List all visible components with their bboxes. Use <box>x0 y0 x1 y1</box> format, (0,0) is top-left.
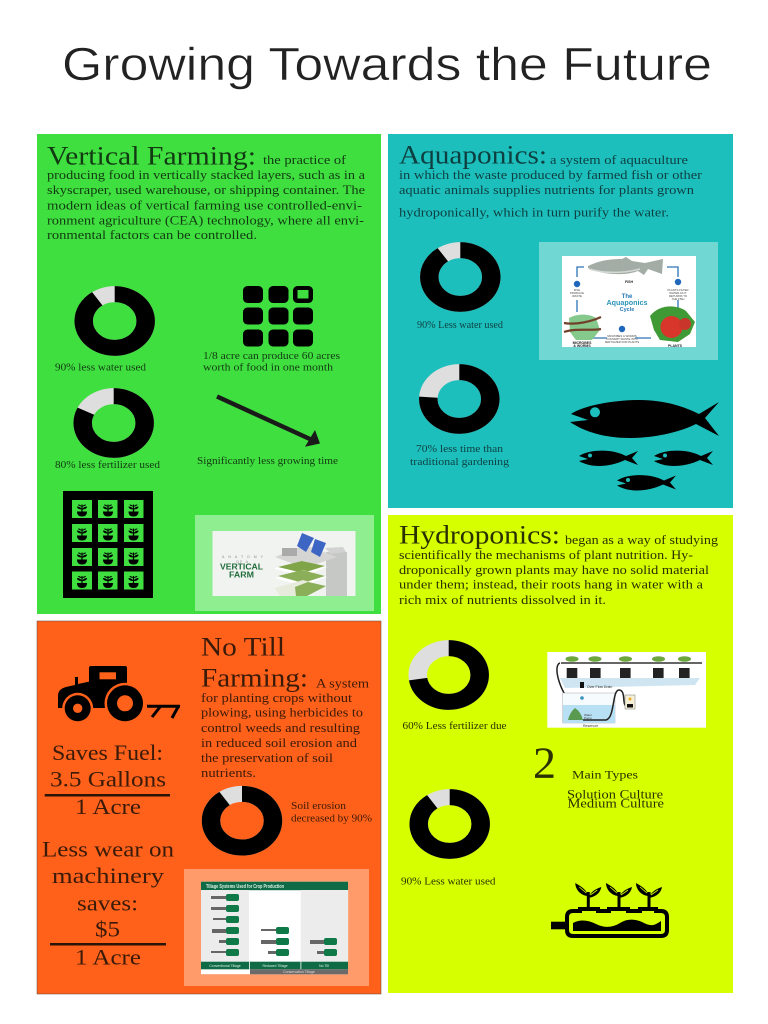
text block: aquaponics description: in which the waste produced by farmed fish or other <box>399 168 703 182</box>
stat: less wear on machinery: $5 <box>95 917 120 942</box>
image: aquaponics cycle: & WORMS <box>573 344 591 348</box>
image: aquaponics cycle: Aquaponics <box>606 300 648 307</box>
text block: aquaponics description: aquatic animals supplies nutrients for plants grown <box>399 183 695 197</box>
image: hydroponic system diagram: Water <box>584 713 592 717</box>
caption: 70% less time: traditional gardening <box>410 457 510 468</box>
stat: saves fuel: 1 Acre <box>75 794 141 819</box>
arrow: downward trend <box>217 396 320 447</box>
text block: vertical farming description: ronmental factors can be controlled. <box>47 228 257 242</box>
image: aquaponics cycle <box>539 242 718 360</box>
image: aquaponics cycle: PLANTS FILTER <box>667 288 689 292</box>
stat: saves fuel: Saves Fuel: <box>52 740 163 765</box>
text block: vertical farming description: the practice of <box>263 153 347 167</box>
text block: no till description: the preservation of soil <box>201 751 334 765</box>
image: aquaponics cycle: FISH <box>574 288 580 292</box>
image: hydroponic system diagram: Over Flow Drain <box>587 685 612 689</box>
caption: soil erosion: Soil erosion <box>291 801 347 812</box>
donut chart: soil erosion <box>211 794 273 848</box>
text block: no till description: plowing, using herbicides to <box>201 706 363 720</box>
text block: no till description: in reduced soil erosion and <box>201 736 358 750</box>
image: tillage systems chart: Reduced Tillage <box>262 964 288 968</box>
image: aquaponics cycle: MICROBES <box>573 341 592 345</box>
text block: aquaponics description: hydroponically, which in turn purify the water. <box>399 206 669 220</box>
text block: aquaponics description: a system of aquaculture <box>550 153 689 167</box>
stat: less wear on machinery: saves: <box>77 891 138 916</box>
text block: aquaponics description <box>399 153 703 220</box>
icon: tractor with plow <box>58 666 180 724</box>
image: tillage systems chart: Conservation Tillage <box>283 970 315 974</box>
panel: vertical farming <box>37 134 381 614</box>
text block: no till description: control weeds and resulting <box>201 721 361 735</box>
panel: aquaponics <box>388 134 733 508</box>
image: aquaponics cycle: The <box>622 294 633 300</box>
text: solution and medium culture: Medium Culture <box>568 797 665 811</box>
title: Growing Towards the Future <box>62 38 712 90</box>
text block: vertical farming description: producing food in vertically stacked layers, such as in a <box>47 168 366 182</box>
text: solution and medium culture <box>567 787 665 811</box>
text block: no till description <box>201 676 369 780</box>
text block: vertical farming description: skyscraper, used warehouse, or shipping container. The <box>47 183 366 197</box>
icon: small fish left <box>579 451 638 466</box>
image: aquaponics cycle: MICROBES & WORMS <box>607 334 637 338</box>
image: aquaponics cycle: CONVERT WASTE INTO <box>606 337 639 341</box>
image: hydroponic system diagram <box>547 652 706 728</box>
text block: hydroponics description: under them; instead, their roots hang in water with a <box>399 578 704 592</box>
image: aquaponics cycle: WASTE <box>572 294 582 298</box>
image: tillage systems chart: Tillage Systems Used for Crop Production <box>206 884 284 890</box>
donut chart: 90% less water <box>429 250 491 304</box>
caption: 1/8 acre <box>203 351 340 374</box>
icon: vertical stacked plant pots <box>63 491 153 598</box>
caption: 70% less time <box>410 444 510 468</box>
text block: hydroponics description: rich mix of nutrients dissolved in it. <box>399 593 606 607</box>
donut chart: 90% less water <box>84 294 146 348</box>
heading: no till farming: No Till <box>201 632 285 662</box>
heading: aquaponics: Aquaponics: <box>399 140 547 170</box>
donut chart: 80% less fertilizer <box>83 396 145 450</box>
panel: hydroponics <box>388 515 733 993</box>
icon: large fish <box>570 400 719 438</box>
stat: less wear on machinery: machinery <box>52 863 164 888</box>
image: hydroponic system diagram: Reservoir <box>583 724 599 728</box>
text block: no till description: nutrients. <box>201 766 256 780</box>
caption: 90% less water: 90% Less water used <box>401 876 496 888</box>
image: aquaponics cycle: PLANTS <box>668 344 683 348</box>
stat: less wear on machinery: Less wear on <box>42 837 174 862</box>
donut chart: 70% less time <box>428 372 490 426</box>
icon: hydroponic tank with sprouts <box>551 883 667 936</box>
text block: no till description: for planting crops without <box>201 691 353 705</box>
image: aquaponics cycle: FISH <box>625 280 633 284</box>
stat: less wear on machinery <box>42 837 174 969</box>
text block: vertical farming description: ronment agriculture (CEA) technology, where all envi- <box>47 214 364 228</box>
caption: 1/8 acre: 1/8 acre can produce 60 acres <box>203 351 340 362</box>
image: aquaponics cycle: FERTILIZER FOR PLANTS <box>605 340 639 344</box>
caption: soil erosion: decreased by 90% <box>291 814 372 825</box>
heading: no till farming <box>201 632 308 693</box>
image: aquaponics cycle: RETURNS TO <box>669 294 688 298</box>
text block: vertical farming description: modern ideas of vertical farming use controlled-envi- <box>47 198 362 212</box>
panel: no till farming <box>37 621 381 994</box>
stat: less wear on machinery: 1 Acre <box>75 944 141 969</box>
caption: 90% less water: 90% Less water used <box>417 320 504 331</box>
text block: hydroponics description: droponically grown plants may have no solid material <box>399 563 710 577</box>
image: anatomy of a vertical farm <box>195 515 374 611</box>
donut chart: 60% less fertilizer <box>418 648 480 702</box>
caption: 90% less water: 90% less water used <box>55 363 147 374</box>
image: tillage systems chart: Conventional Tillage <box>209 964 241 968</box>
icon: grid of nine squares <box>243 286 313 346</box>
caption: 70% less time: 70% less time than <box>416 444 504 455</box>
image: aquaponics cycle: WATER AS IT <box>669 291 687 295</box>
icon: small fish bottom <box>617 475 676 490</box>
text block: hydroponics description: began as a way of studying <box>565 533 719 547</box>
heading: hydroponics: Hydroponics: <box>399 519 560 549</box>
caption: growing time: Significantly less growing time <box>197 456 338 467</box>
stat: saves fuel: 3.5 Gallons <box>50 767 166 792</box>
image: hydroponic system diagram: Pump <box>584 716 592 720</box>
heading: no till farming: Farming: <box>201 663 308 693</box>
image: anatomy of a vertical farm: OF A <box>236 560 249 564</box>
image: aquaponics cycle: Cycle <box>620 307 634 313</box>
donut chart: 90% less water <box>419 797 481 851</box>
image: tillage systems chart <box>184 869 369 986</box>
text block: hydroponics description: scientifically the mechanisms of plant nutrition. Hy- <box>399 548 693 562</box>
image: aquaponics cycle: PRODUCE <box>570 291 584 295</box>
text: main types: Main Types <box>572 767 638 781</box>
text: solution and medium culture: Solution Culture <box>567 787 664 801</box>
caption: 80% less fertilizer: 80% less fertilizer used <box>55 460 161 471</box>
text block: no till description: A system <box>316 676 369 690</box>
image: anatomy of a vertical farm: VERTICAL <box>220 562 263 572</box>
heading: vertical farming: Vertical Farming: <box>47 140 256 170</box>
image: anatomy of a vertical farm: FARM <box>229 570 254 580</box>
image: aquaponics cycle: THE FISH <box>672 297 684 301</box>
image: anatomy of a vertical farm: ANATOMY <box>222 555 264 559</box>
caption: 1/8 acre: worth of food in one month <box>203 363 334 374</box>
stat: number of main types: 2 <box>533 738 556 787</box>
image: tillage systems chart: No Till <box>319 964 329 968</box>
icon: small fish right <box>654 451 713 466</box>
caption: 60% less fertilizer: 60% Less fertilizer due <box>402 721 507 732</box>
caption: soil erosion <box>291 801 372 825</box>
text block: vertical farming description <box>47 153 366 242</box>
text block: hydroponics description <box>399 533 719 607</box>
stat: saves fuel <box>45 740 170 819</box>
